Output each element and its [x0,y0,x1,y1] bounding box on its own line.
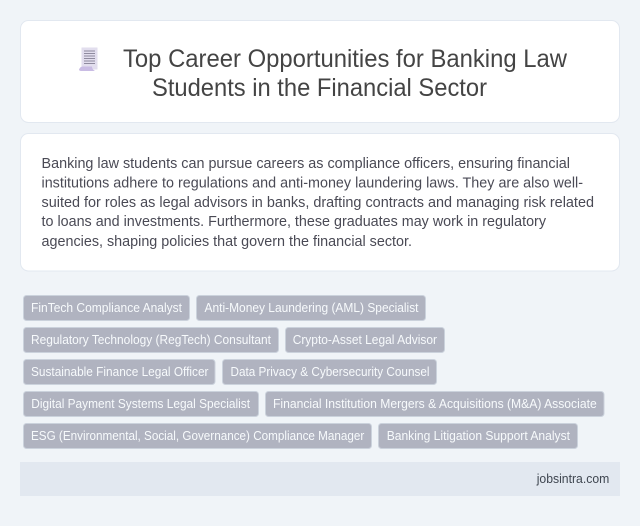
tag: Banking Litigation Support Analyst [378,424,578,448]
tag: RegTech Consultant: Regulatory Technology (RegTech) Consultant [31,333,271,347]
tag: FinTech Compliance Analyst: FinTech Compliance Analyst [31,301,182,315]
tag: RegTech Consultant [24,328,278,352]
text block: career summary: Banking law students can pursue careers as compliance officers, ensuring financial [42,156,570,172]
tag: Sustainable Finance Legal Officer: Sustainable Finance Legal Officer [31,365,208,379]
tag: Banking Litigation Support Analyst: Banking Litigation Support Analyst [387,429,571,443]
tag: Data Privacy and Cybersecurity Counsel: Data Privacy & Cybersecurity Counsel [230,365,430,379]
tag: ESG Compliance Manager [24,424,372,448]
tag: Data Privacy and Cybersecurity Counsel [222,360,436,384]
tag: ESG Compliance Manager: ESG (Environmental, Social, Governance) Compliance Manager [31,429,364,443]
tag: Digital Payment Systems Legal Specialist: Digital Payment Systems Legal Specialist [31,397,250,411]
text block: career summary: agencies, shaping policies that govern the financial sector. [42,234,412,250]
text block: career summary: to loans and investments. Furthermore, these graduates may work in regulatory [42,214,547,230]
tag: Anti-Money Laundering Specialist: Anti-Money Laundering (AML) Specialist [204,301,419,315]
tag: FinTech Compliance Analyst [24,296,190,320]
panel: header [20,20,620,122]
title: Top Career Opportunities for Banking Law [123,45,568,73]
text block: career summary [42,156,594,250]
title [123,45,568,102]
tag: Crypto-Asset Legal Advisor [286,328,444,352]
panel: description [20,134,620,271]
tag list: career roles [24,296,604,448]
text block: career summary: suited for roles as legal advisors in banks, drafting contracts and managing risk related [42,195,594,211]
footer source text: jobsintra.com [536,472,609,486]
text block: career summary: institutions adhere to regulations and anti-money laundering laws. They are also well- [42,176,583,192]
tag: Anti-Money Laundering Specialist [196,296,426,320]
tag: Digital Payment Systems Legal Specialist [24,392,258,416]
tag: Crypto-Asset Legal Advisor: Crypto-Asset Legal Advisor [293,333,437,347]
title: Students in the Financial Sector [152,74,487,102]
footer [20,462,620,496]
icon: scroll document [79,48,98,71]
tag: M&A Associate: Financial Institution Mergers & Acquisitions (M&A) Associate [273,397,597,411]
tag: Sustainable Finance Legal Officer [24,360,215,384]
tag: M&A Associate [266,392,604,416]
